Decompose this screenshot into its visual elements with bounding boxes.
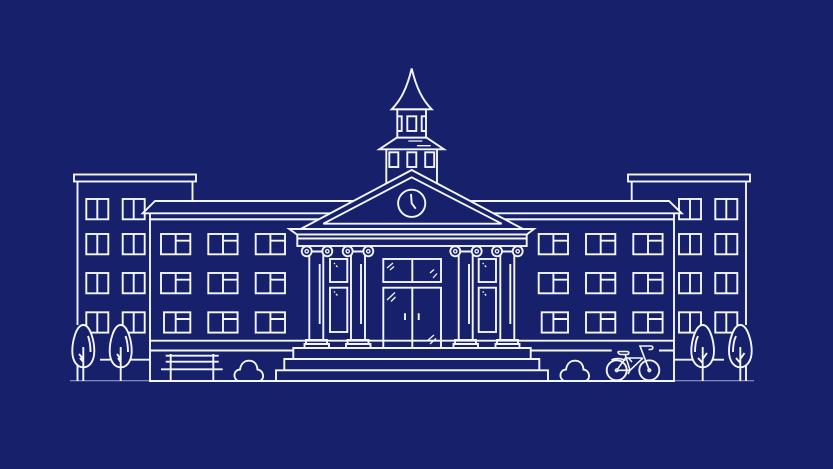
double doors <box>383 288 441 348</box>
front steps <box>276 348 548 381</box>
capitals <box>450 246 523 256</box>
left wing windows <box>161 234 285 333</box>
left trees <box>72 325 132 381</box>
bell tower <box>379 68 444 185</box>
left bush <box>234 361 263 381</box>
main entrance door <box>383 259 441 348</box>
transom window <box>383 259 441 282</box>
capitals <box>302 246 373 256</box>
spire roof <box>392 68 432 109</box>
tree 2 <box>110 325 132 381</box>
left tower block <box>74 174 196 381</box>
tree 3 <box>691 325 714 381</box>
central main wing <box>143 201 682 381</box>
portico side windows <box>330 259 496 332</box>
right bush <box>560 361 589 381</box>
entablature <box>297 234 527 246</box>
left tower windows <box>86 199 145 333</box>
right wing windows <box>539 234 663 333</box>
upper tower section <box>397 109 426 138</box>
bench <box>161 354 223 381</box>
lower tower section <box>386 149 437 185</box>
right tower windows <box>679 199 737 333</box>
right trees <box>691 325 752 381</box>
tree 4 <box>729 325 752 381</box>
left columns <box>302 246 373 348</box>
lower tower roof <box>379 138 444 149</box>
right tower block <box>628 174 750 381</box>
clock <box>398 190 425 217</box>
bicycle <box>607 346 659 380</box>
right columns <box>450 246 523 348</box>
ground line <box>70 380 754 382</box>
pediment <box>289 170 534 234</box>
tree 1 <box>72 325 94 381</box>
